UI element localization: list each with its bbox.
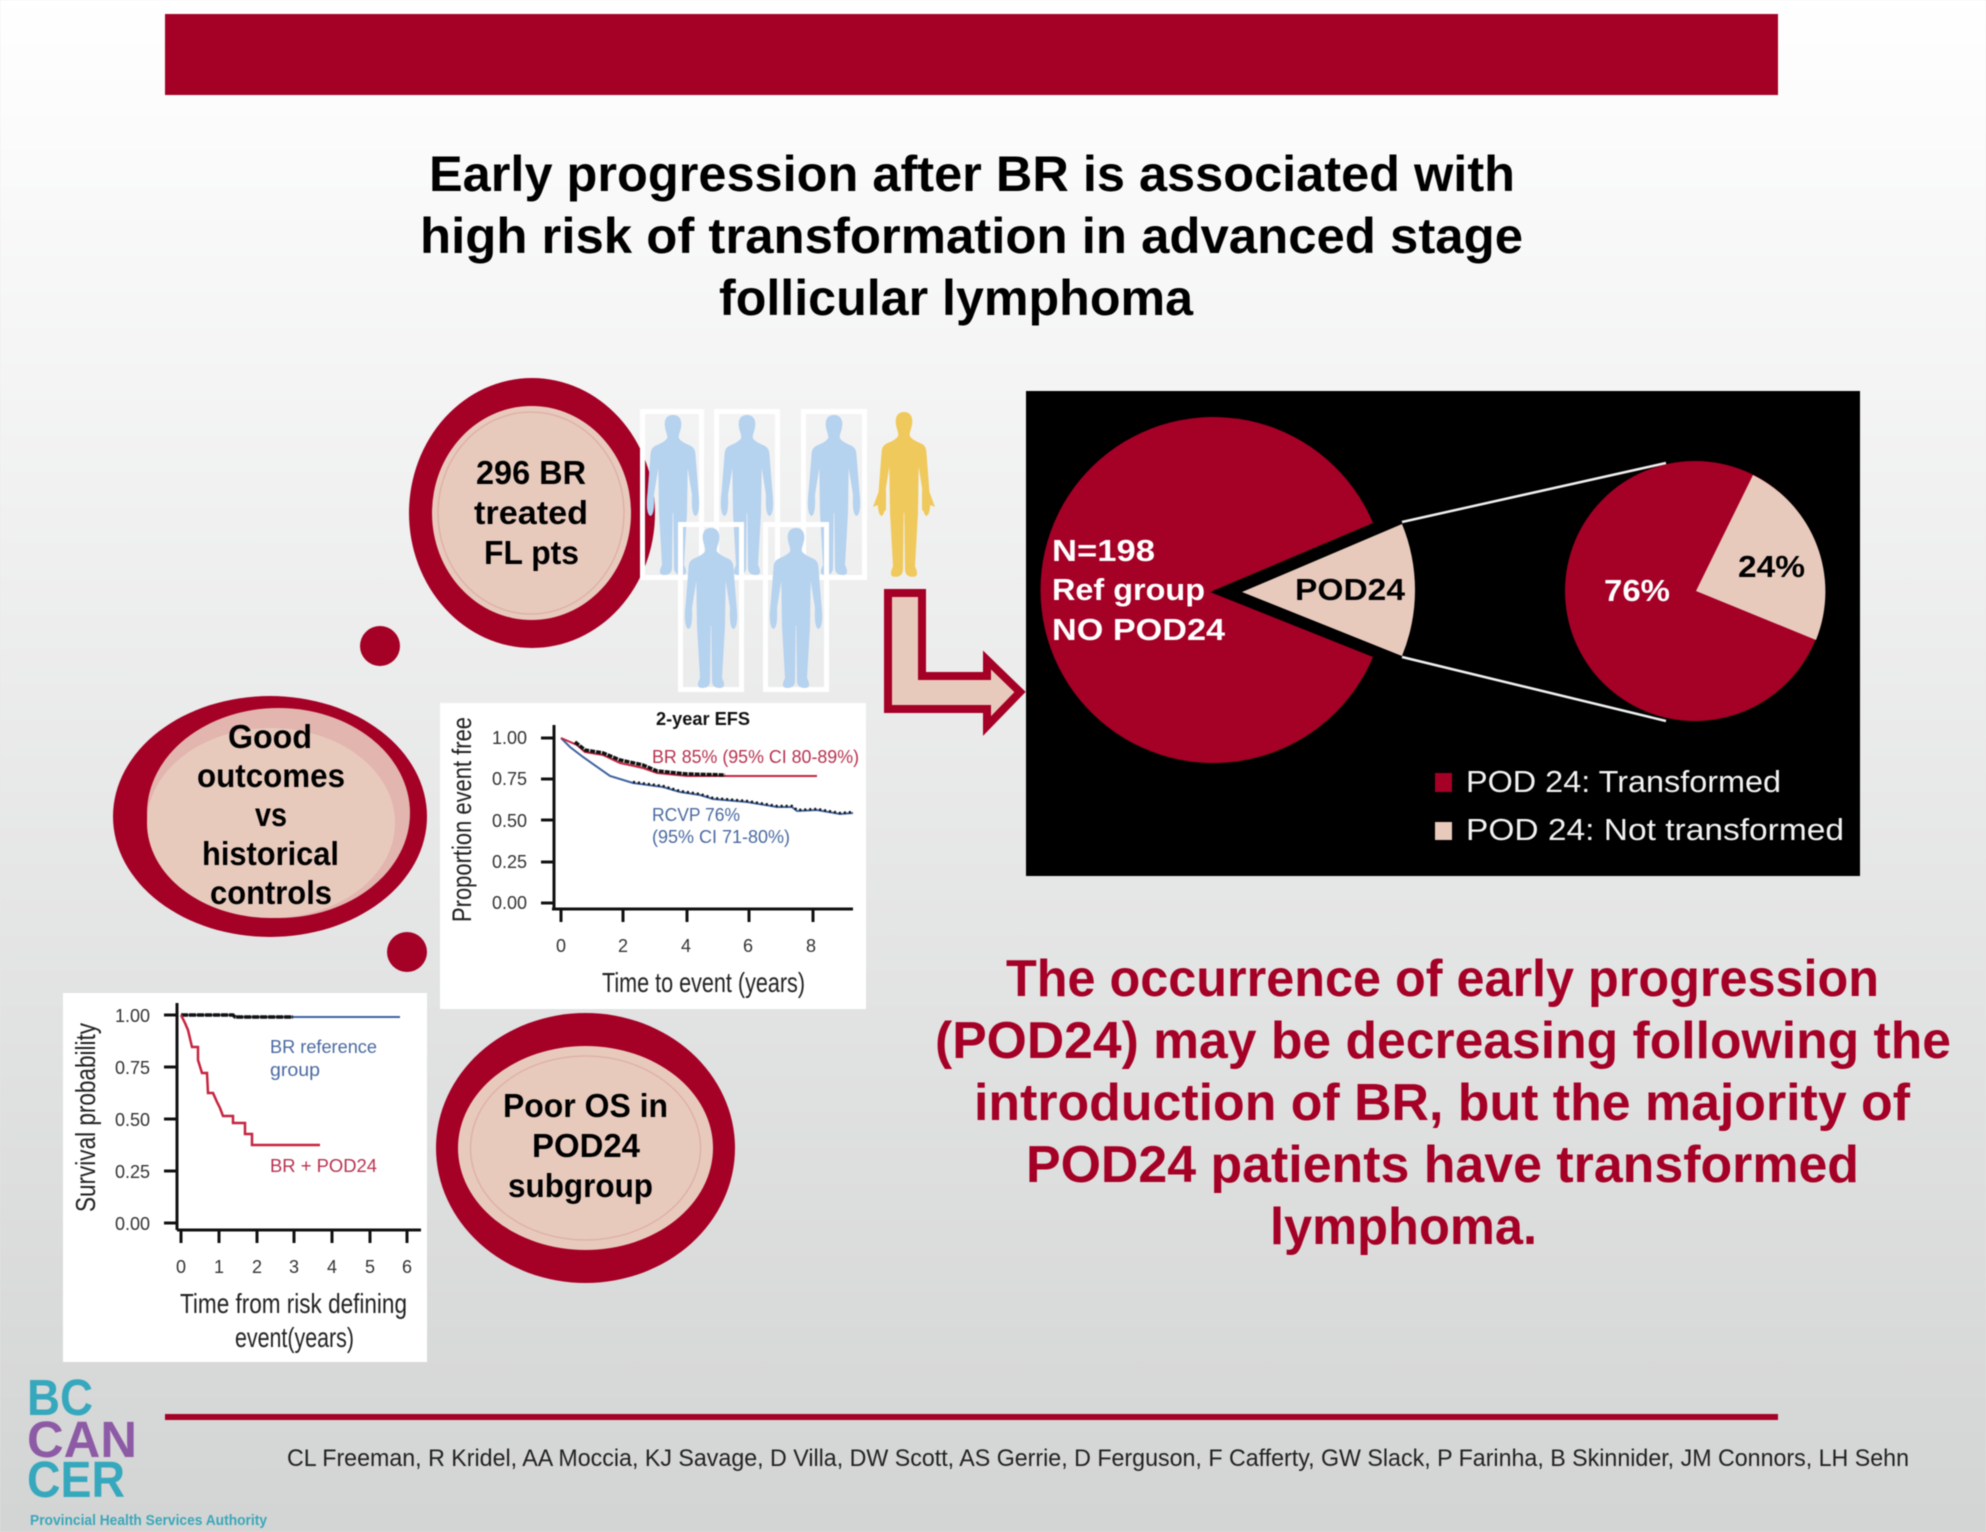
y tick labels: 0.50 <box>492 811 527 831</box>
conclusion text: POD24 patients have transformed <box>1026 1136 1859 1194</box>
bubble: 296 BR treated FL patients: treated <box>474 494 588 531</box>
bubble: 296 BR treated FL patients <box>409 378 655 648</box>
x axis label: Time to event (years) <box>602 967 805 998</box>
authors: CL Freeman, R Kridel, AA Moccia, KJ Savage, D Villa, DW Scott, AS Gerrie, D Ferguson, F Cafferty, GW Slack, P Farinha, B Skinnider, JM Connors, LH Sehn <box>287 1445 1909 1472</box>
x tick labels: 4 <box>681 936 691 956</box>
label: 76%: 76% <box>1604 573 1670 608</box>
chart title: 2-year EFS <box>656 709 750 729</box>
conclusion text: The occurrence of early progression <box>1006 950 1879 1008</box>
x tick labels: 0 <box>176 1257 186 1277</box>
bubble: good outcomes: Good <box>228 718 312 755</box>
x axis label <box>180 1288 407 1353</box>
series label: RCVP: (95% CI 71-80%) <box>652 827 790 847</box>
conclusion text: (POD24) may be decreasing following the <box>935 1012 1951 1070</box>
label: reference group <box>1052 533 1226 647</box>
axes <box>164 1003 421 1243</box>
curve: reference censor marks <box>181 1015 293 1017</box>
x axis label: Time from risk defining <box>180 1288 407 1319</box>
connector dot lower <box>387 932 427 972</box>
series label: reference <box>270 1037 377 1080</box>
logo: BC Cancer: CER <box>27 1451 125 1508</box>
legend: POD 24: Transformed <box>1466 764 1781 799</box>
label: reference group: NO POD24 <box>1052 612 1226 647</box>
x tick labels: 2 <box>618 936 628 956</box>
x tick labels: 4 <box>327 1257 337 1277</box>
arrow to pie chart <box>888 593 1020 726</box>
y axis label: Proportion event free <box>447 717 477 922</box>
x tick labels <box>556 936 816 956</box>
title <box>420 146 1523 326</box>
series label: reference: BR reference <box>270 1037 377 1057</box>
top banner <box>165 14 1778 95</box>
pie: POD24 breakdown <box>1565 461 1825 721</box>
x tick labels: 1 <box>214 1257 224 1277</box>
y tick labels: 1.00 <box>115 1006 150 1026</box>
series label: reference: group <box>270 1060 320 1080</box>
axes <box>541 725 853 922</box>
x tick labels: 6 <box>402 1257 412 1277</box>
footer rule <box>165 1414 1778 1420</box>
curve: BR censor marks <box>575 742 725 775</box>
bubble: 296 BR treated FL patients: FL pts <box>484 534 579 571</box>
logo: BC Cancer: Provincial Health Services Authority <box>30 1512 268 1529</box>
series label: POD24: BR + POD24 <box>270 1156 377 1176</box>
patient figures <box>642 412 935 690</box>
curve: BR + POD24 <box>181 1015 320 1145</box>
y tick labels: 0.50 <box>115 1110 150 1130</box>
x tick labels <box>176 1257 412 1277</box>
y tick labels <box>115 1006 150 1234</box>
y tick labels: 0.25 <box>115 1162 150 1182</box>
label: reference group: Ref group <box>1052 572 1205 607</box>
connector dot upper <box>360 626 400 666</box>
pie slice: POD24 <box>1242 524 1415 656</box>
label: 24%: 24% <box>1738 549 1805 584</box>
x tick labels: 3 <box>289 1257 299 1277</box>
x tick labels: 2 <box>252 1257 262 1277</box>
bubble: good outcomes: historical <box>202 835 339 872</box>
series label: RCVP <box>652 805 790 847</box>
logo: BC Cancer: BC <box>27 1369 93 1426</box>
pie: reference group <box>1041 417 1373 763</box>
x axis label: event(years) <box>235 1322 354 1353</box>
figure: patient 1 <box>642 412 702 578</box>
legend: POD 24: Not transformed <box>1466 812 1844 847</box>
title: high risk of transformation in advanced stage <box>420 208 1523 264</box>
x tick labels: 5 <box>365 1257 375 1277</box>
logo: BC Cancer: CAN <box>27 1411 137 1468</box>
label: reference group: N=198 <box>1052 533 1155 568</box>
chart: 2-year EFS <box>440 703 866 1009</box>
series label: RCVP: RCVP 76% <box>652 805 740 825</box>
legend <box>1435 764 1844 847</box>
figure: transformed patient <box>873 412 935 577</box>
figure: patient 2 <box>716 412 778 578</box>
y tick labels <box>492 728 527 913</box>
x tick labels: 0 <box>556 936 566 956</box>
figure: patient 4 <box>680 524 742 690</box>
x tick labels: 6 <box>743 936 753 956</box>
y tick labels: 0.25 <box>492 852 527 872</box>
bubble: good outcomes: outcomes <box>197 757 345 794</box>
bubble: poor OS: Poor OS in <box>503 1087 668 1124</box>
curve: RCVP <box>561 738 853 814</box>
y axis label: Survival probability <box>70 1023 101 1212</box>
bubble: good outcomes: controls <box>210 874 332 911</box>
curve: BR reference <box>181 1015 400 1017</box>
y tick labels: 0.00 <box>492 893 527 913</box>
bubble: poor OS <box>436 1013 735 1283</box>
figure: patient 5 <box>766 524 826 690</box>
bubble: 296 BR treated FL patients: 296 BR <box>476 454 586 491</box>
figure: patient 3 <box>804 412 864 578</box>
chart: survival by POD24 <box>63 993 427 1362</box>
conclusion text: lymphoma. <box>1270 1198 1537 1256</box>
bubble: poor OS: subgroup <box>508 1167 653 1204</box>
y tick labels: 0.00 <box>115 1214 150 1234</box>
logo: BC Cancer <box>27 1369 268 1529</box>
bubble: good outcomes <box>113 696 427 937</box>
y tick labels: 1.00 <box>492 728 527 748</box>
y tick labels: 0.75 <box>492 769 527 789</box>
title: follicular lymphoma <box>719 270 1194 326</box>
conclusion text: introduction of BR, but the majority of <box>974 1074 1911 1132</box>
curve: BR <box>561 738 817 776</box>
x tick labels: 8 <box>806 936 816 956</box>
label: POD24: POD24 <box>1295 572 1406 607</box>
connector lines <box>1402 463 1666 721</box>
bubble: good outcomes: vs <box>255 796 287 833</box>
y tick labels: 0.75 <box>115 1058 150 1078</box>
conclusion text <box>935 950 1951 1256</box>
panel: pie charts <box>1026 391 1860 876</box>
series label: BR: BR 85% (95% CI 80-89%) <box>652 747 859 767</box>
curve: RCVP censor marks <box>633 782 853 813</box>
title: Early progression after BR is associated with <box>429 146 1515 202</box>
bubble: poor OS: POD24 <box>532 1127 641 1164</box>
